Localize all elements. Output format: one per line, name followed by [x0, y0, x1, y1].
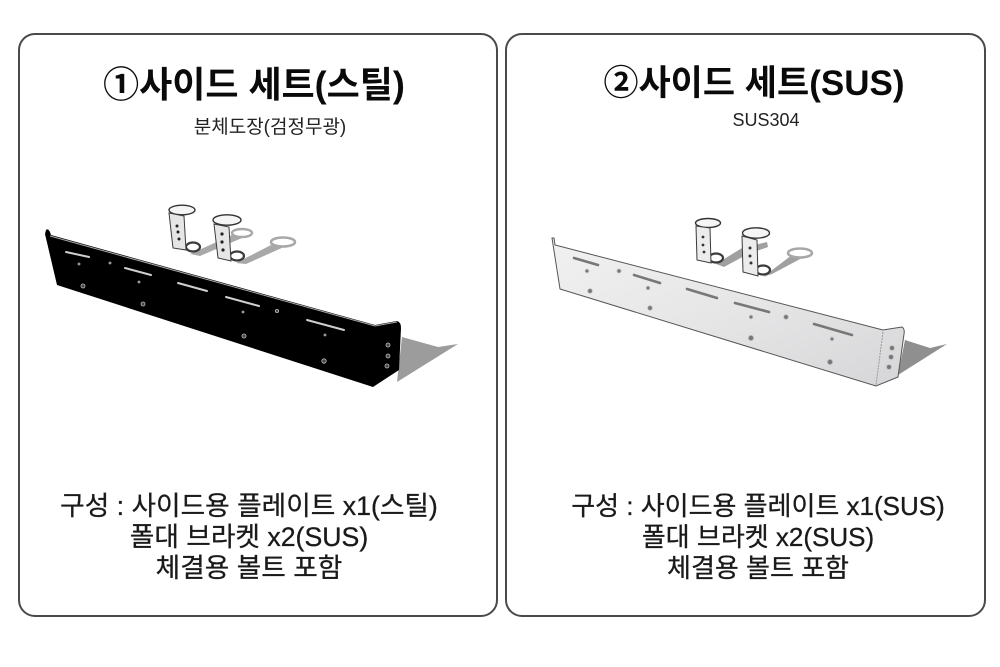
text block: SUS set contents: 폴대 브라켓 x2(SUS) — [642, 522, 874, 552]
text block: SUS set contents: 구성 : 사이드용 플레이트 x1(SUS) — [571, 491, 945, 521]
icon: black plate — [45, 229, 401, 387]
text block: steel set contents: 폴대 브라켓 x2(SUS) — [130, 522, 368, 552]
icon: steel set brackets — [169, 205, 295, 264]
title: steel set: ①사이드 세트(스틸) — [103, 64, 405, 105]
icon: stainless plate — [552, 238, 904, 386]
icon: plate shadow — [397, 337, 458, 382]
text block: SUS set contents: 체결용 볼트 포함 — [667, 553, 849, 583]
icon: SUS set brackets — [696, 218, 812, 277]
text block: steel set contents: 체결용 볼트 포함 — [156, 553, 342, 583]
text block: steel set contents: 구성 : 사이드용 플레이트 x1(스틸) — [60, 491, 438, 521]
panel: steel side set — [18, 33, 498, 617]
subtitle: SUS grade: SUS304 — [732, 110, 800, 130]
title: SUS set: ②사이드 세트(SUS) — [603, 64, 904, 103]
text block: SUS set contents — [571, 491, 945, 583]
text block: steel set contents — [60, 491, 438, 583]
subtitle: steel finish: 분체도장(검정무광) — [194, 117, 346, 138]
icon: SUS plate shadow — [898, 340, 947, 375]
panel: SUS side set — [505, 33, 986, 617]
